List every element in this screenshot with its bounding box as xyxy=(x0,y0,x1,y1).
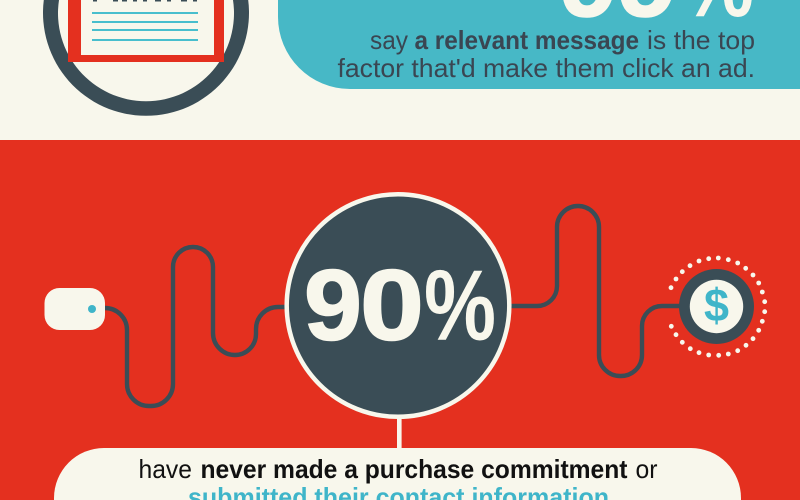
icon: dollar coin xyxy=(669,256,767,358)
icon ring xyxy=(43,0,249,116)
cable: mouse to statistic xyxy=(105,247,290,406)
icon: dollar coin: $ xyxy=(704,279,729,331)
statistic circle: 90% xyxy=(287,194,509,417)
callout background xyxy=(54,448,741,500)
document frame xyxy=(68,0,224,62)
red panel background xyxy=(0,140,800,500)
document text lines xyxy=(92,13,198,40)
panel: relevant message statistic xyxy=(278,0,800,89)
teal panel background xyxy=(278,0,800,89)
callout text: never made a purchase commitment xyxy=(200,454,628,484)
cable: statistic to dollar coin xyxy=(505,206,685,376)
panel: purchase statistic xyxy=(0,140,800,500)
callout: purchase commitment xyxy=(54,448,741,500)
connector line xyxy=(397,415,402,451)
callout text: have xyxy=(138,454,192,484)
callout text: or xyxy=(636,454,658,484)
statistic circle: 90%: % xyxy=(424,250,496,362)
statistic circle: 90%: 0 xyxy=(360,250,424,362)
document heading remnants xyxy=(93,0,197,2)
statistic: 99% xyxy=(560,0,754,38)
icon: document in ring xyxy=(43,0,249,116)
message text: a relevant message xyxy=(414,25,639,55)
callout text xyxy=(138,454,658,500)
icon: computer mouse xyxy=(44,288,105,330)
message text xyxy=(338,25,755,83)
statistic circle: 90%: 9 xyxy=(304,250,362,362)
message text: factor that'd make them click an ad. xyxy=(338,53,755,83)
message text: say xyxy=(370,25,408,55)
message text: is the top xyxy=(647,25,755,55)
dotted halo xyxy=(669,256,767,358)
